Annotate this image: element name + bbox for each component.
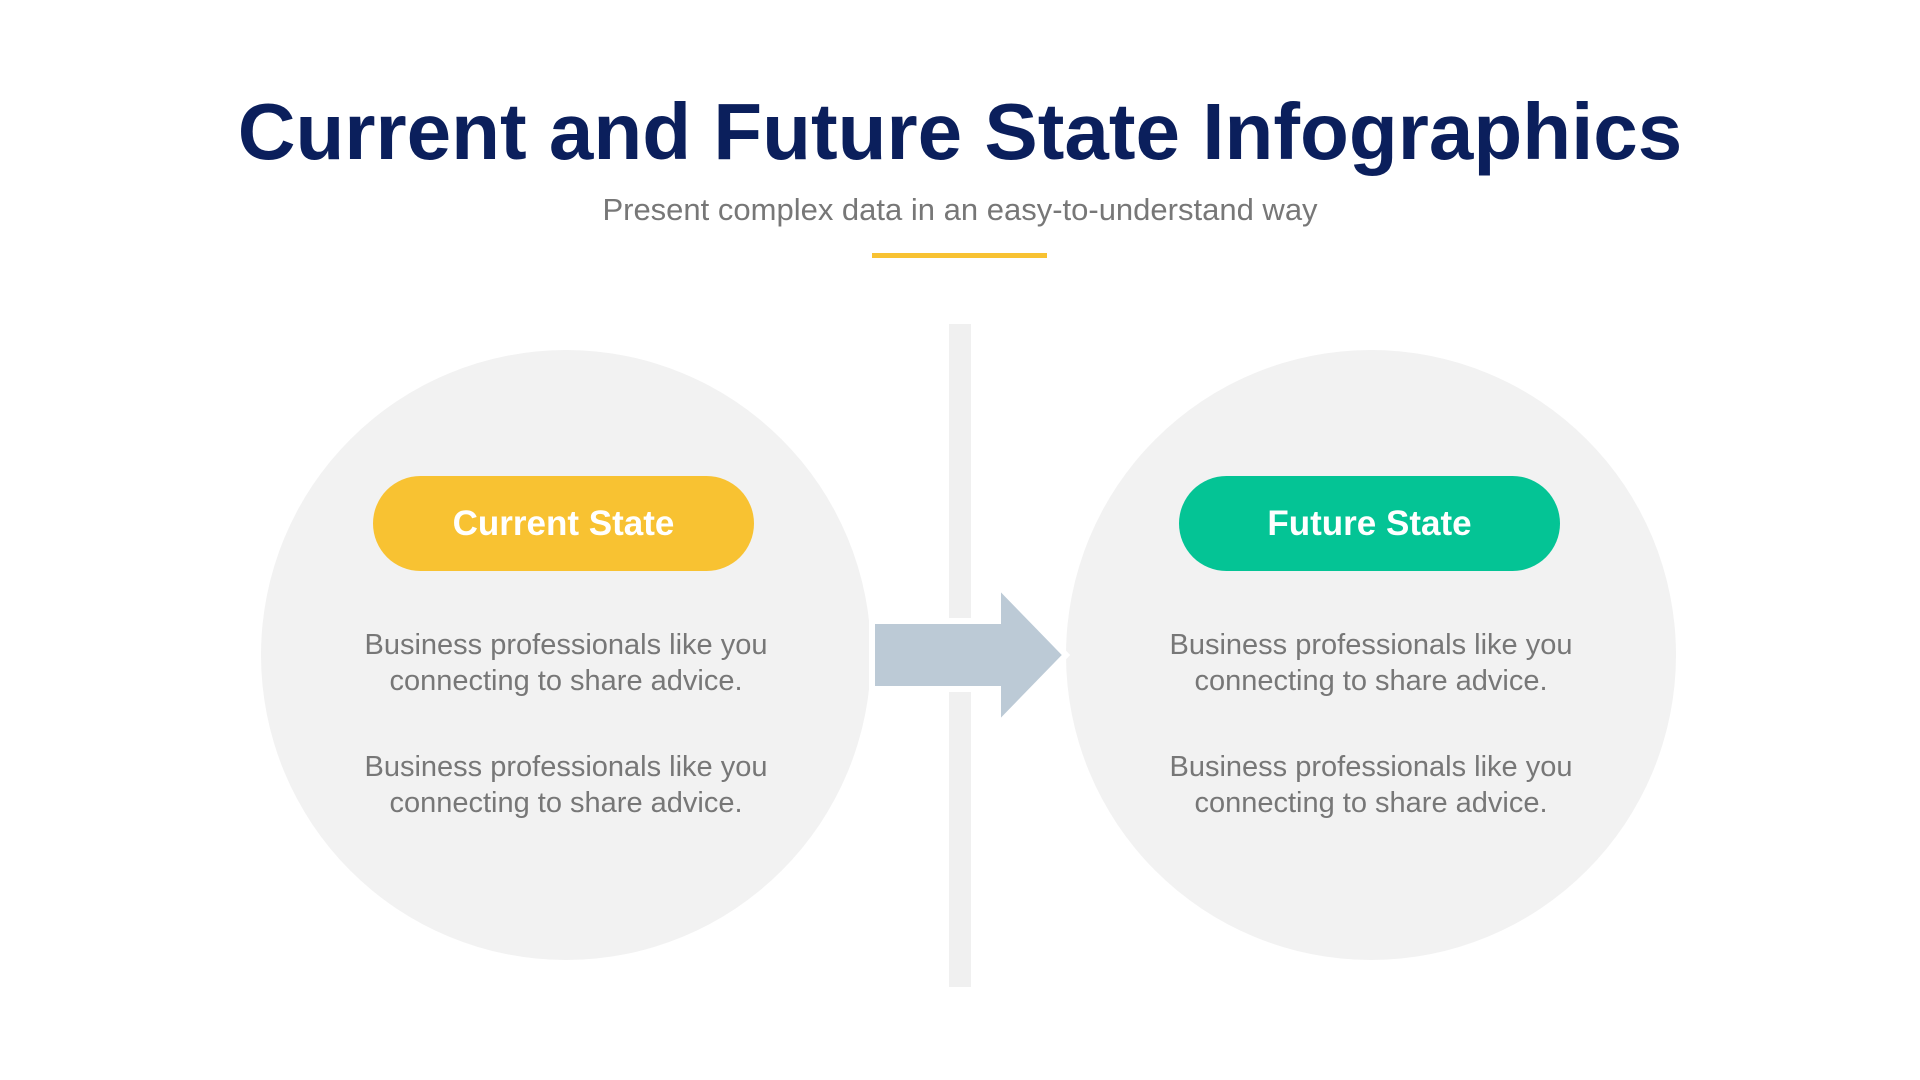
panel: future state — [1066, 350, 1676, 960]
title: Current and Future State Infographics — [238, 87, 1682, 176]
vertical divider — [949, 324, 971, 987]
text: current state paragraph 2: Business professionals like you connecting to share advice. — [364, 751, 767, 819]
text: current state paragraph 1: Business professionals like you connecting to share advice. — [364, 629, 767, 697]
panel: current state — [261, 350, 871, 960]
arrow — [869, 592, 1070, 718]
subtitle: Present complex data in an easy-to-understand way — [602, 192, 1318, 227]
accent underline — [872, 253, 1047, 258]
text: future state paragraph 1: Business professionals like you connecting to share advice. — [1170, 629, 1572, 697]
text: future state paragraph 2: Business professionals like you connecting to share advice. — [1170, 751, 1572, 819]
pill: current state — [373, 476, 754, 571]
pill: current state: Current State — [453, 504, 674, 543]
pill: future state: Future State — [1267, 504, 1472, 543]
pill: future state — [1179, 476, 1560, 571]
